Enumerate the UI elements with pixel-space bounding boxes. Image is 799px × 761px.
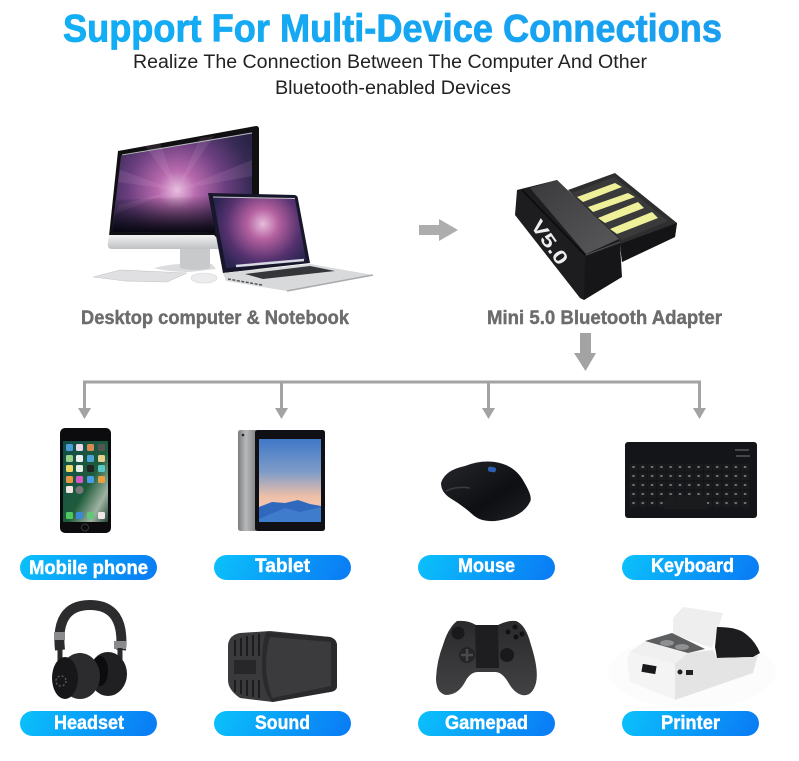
pill: mobile phone: Mobile phone [29,558,148,579]
icon: mouse [441,462,531,521]
icon: desktop monitor [108,126,259,272]
arrow: computer to adapter [419,219,458,241]
icon: white mouse [191,273,217,283]
icon: black keyboard [625,442,757,518]
pill: printer: Printer [661,713,721,734]
subtitle: Realize The Connection Between The Computer And Other [133,52,648,73]
housing [515,180,620,300]
pill: mouse: Mouse [458,556,515,577]
pill: sound [214,711,351,736]
icon: printer [608,607,776,708]
label: desktop computer and notebook: Desktop computer & Notebook [81,308,349,329]
pill: printer [622,711,759,736]
connector [568,173,677,262]
pill: headset [20,711,157,736]
icon: headset [52,605,127,699]
icon: gamepad [436,621,537,695]
pill: mouse [418,555,555,580]
label: V5.0: V5.0 [526,216,572,269]
pill: keyboard [622,555,759,580]
subtitle: Bluetooth-enabled Devices [275,78,511,99]
panel: desktop computer and notebook [93,126,373,291]
gold contacts [577,183,658,234]
pill: tablet: Tablet [255,556,311,577]
pill: gamepad [418,711,555,736]
connector tree with arrows [78,380,706,419]
arrow: adapter down [574,333,596,371]
icon: bluetooth adapter [515,173,677,300]
pill: headset: Headset [54,713,125,734]
pill: sound: Sound [255,713,310,734]
icon: tablet [238,430,325,531]
icon: white keyboard [93,270,187,282]
icon: mobile phone [60,428,111,533]
title: Support For Multi-Device Connections [63,8,722,50]
subtitle [133,52,648,99]
pill: gamepad: Gamepad [445,713,528,734]
pill: tablet [214,555,351,580]
label: mini 5.0 bluetooth adapter: Mini 5.0 Bluetooth Adapter [487,308,723,329]
icon: speaker [228,631,337,702]
pill: keyboard: Keyboard [651,556,734,577]
icon: notebook [208,193,373,291]
